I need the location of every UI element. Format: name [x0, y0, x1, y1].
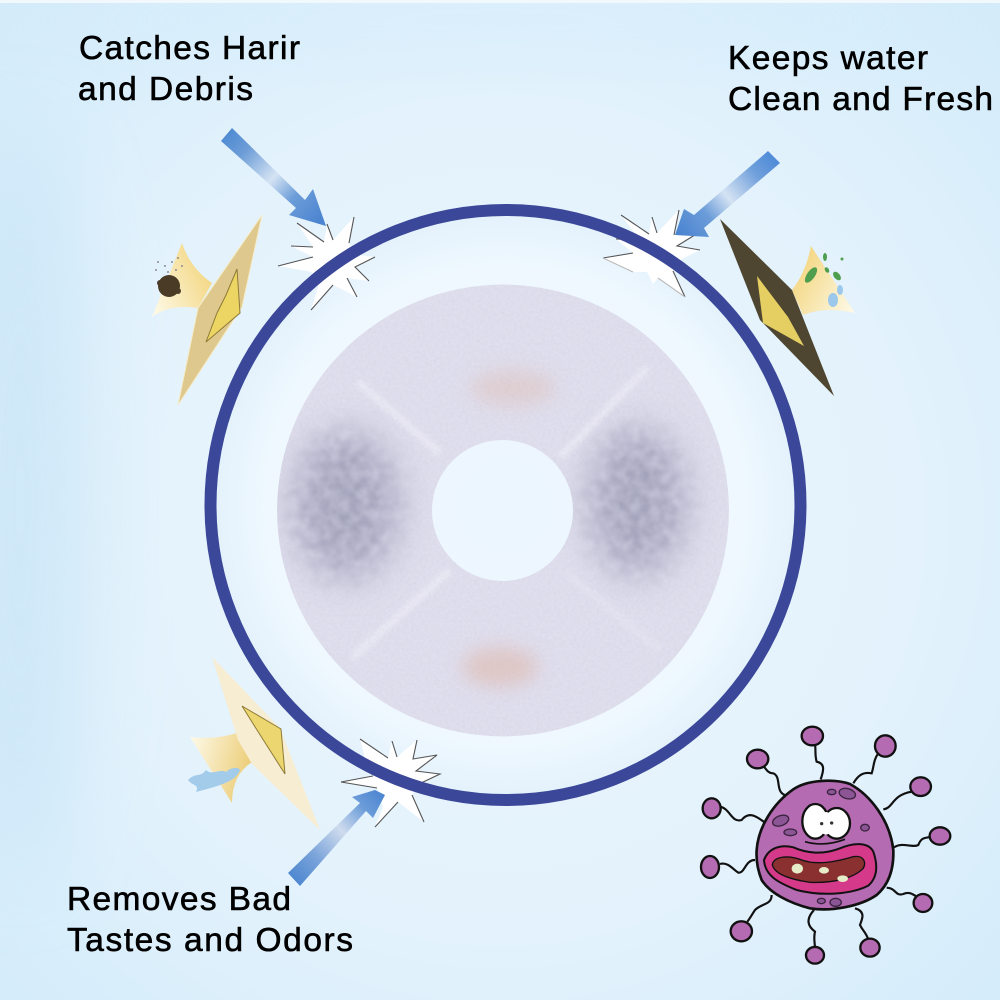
funnel — [190, 731, 252, 803]
dark patch right mottled — [589, 428, 685, 576]
label: keeps water: Clean and Fresh — [728, 81, 993, 118]
dark patch left soft — [296, 433, 396, 577]
water drops — [828, 285, 843, 307]
label: keeps water: Keeps water — [728, 40, 928, 77]
tan diamond — [178, 215, 262, 405]
dark patch left mottled — [294, 431, 398, 579]
label: removes tastes: Tastes and Odors — [67, 922, 353, 959]
virus arms — [720, 744, 932, 948]
filter disc — [277, 284, 729, 736]
icon: fresh water filter — [720, 219, 855, 396]
label: removes tastes: Removes Bad — [67, 881, 291, 918]
inner circle glow — [216, 215, 796, 795]
starburst top right — [603, 210, 700, 297]
yellow inner diamond — [206, 269, 240, 342]
arrow bottom left — [288, 790, 385, 886]
icon: odor filter — [188, 657, 320, 830]
label: removes tastes — [67, 881, 353, 959]
starburst bottom left — [341, 739, 440, 827]
starburst top left — [278, 217, 375, 310]
virus balls — [701, 727, 950, 964]
icon: dust filter — [152, 215, 262, 405]
arrow top right — [675, 151, 780, 237]
dark patch right soft — [591, 430, 683, 574]
label: catches hair: Catches Harir — [79, 30, 300, 67]
pale diamond — [212, 657, 320, 830]
dust particles — [155, 257, 183, 297]
pink patch top — [471, 370, 555, 406]
virus character — [701, 727, 950, 964]
blue ring — [210, 210, 800, 800]
arrow top left — [221, 128, 326, 226]
virus mouth — [764, 844, 876, 894]
label: catches hair: and Debris — [78, 71, 253, 108]
label: catches hair — [78, 30, 300, 108]
virus mouth interior — [772, 856, 865, 882]
pink patch bottom — [462, 647, 538, 687]
leaves — [803, 253, 844, 285]
virus spots — [771, 787, 869, 906]
disc seams — [352, 368, 660, 658]
label: keeps water — [728, 40, 993, 118]
cream funnel — [792, 246, 855, 315]
dark diamond — [720, 219, 834, 396]
disc fibre texture — [277, 284, 729, 736]
yellow inner diamond — [242, 706, 285, 774]
water splash — [188, 768, 240, 792]
virus eyes — [802, 804, 850, 844]
dust funnel — [152, 243, 212, 317]
virus teeth — [792, 864, 848, 882]
yellow inner diamond — [757, 276, 804, 346]
virus body — [757, 781, 893, 909]
